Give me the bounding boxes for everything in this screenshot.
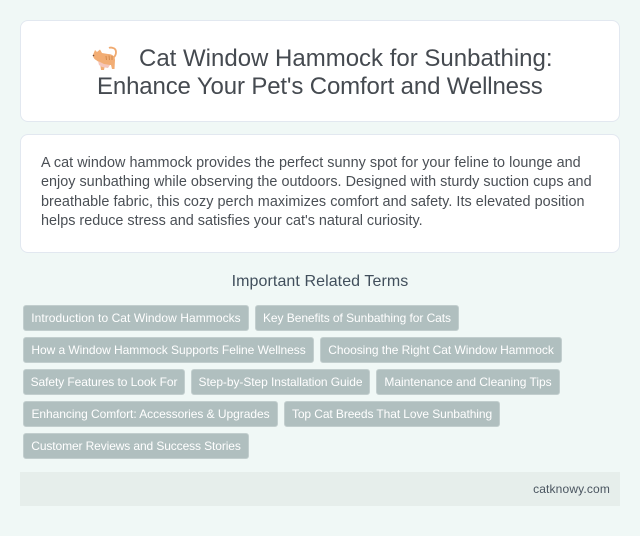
description text line 3: breathable fabric, this cozy perch maximizes comfort and safety. Its elevated position bbox=[41, 194, 585, 210]
tag: Choosing the Right Cat Window Hammock bbox=[328, 343, 554, 357]
heading: related terms: Important Related Terms bbox=[232, 273, 408, 290]
tag bbox=[376, 369, 560, 395]
tag bbox=[23, 337, 314, 363]
tag bbox=[23, 401, 278, 427]
tag: Step-by-Step Installation Guide bbox=[199, 375, 362, 389]
tag: Introduction to Cat Window Hammocks bbox=[31, 311, 241, 325]
tag: Customer Reviews and Success Stories bbox=[31, 439, 241, 453]
tag: Maintenance and Cleaning Tips bbox=[384, 375, 552, 389]
tag: Top Cat Breeds That Love Sunbathing bbox=[292, 407, 492, 421]
tag bbox=[191, 369, 370, 395]
description text line 1: A cat window hammock provides the perfect sunny spot for your feline to lounge and bbox=[41, 155, 581, 171]
icon: cat bbox=[92, 46, 117, 70]
title: Cat Window Hammock for Sunbathing: bbox=[139, 45, 553, 72]
tag bbox=[23, 369, 185, 395]
panel: description bbox=[20, 134, 620, 253]
description text line 2: enjoy sunbathing while observing the outdoors. Designed with sturdy suction cups and bbox=[41, 174, 592, 190]
tag: Key Benefits of Sunbathing for Cats bbox=[263, 311, 451, 325]
tag bbox=[320, 337, 562, 363]
panel: title card bbox=[20, 20, 620, 122]
tag: How a Window Hammock Supports Feline Wellness bbox=[31, 343, 306, 357]
title line 2: Enhance Your Pet's Comfort and Wellness bbox=[97, 73, 543, 100]
footer bbox=[20, 472, 620, 506]
tag: Enhancing Comfort: Accessories & Upgrades bbox=[31, 407, 270, 421]
tag: Safety Features to Look For bbox=[31, 375, 177, 389]
footer: catknowy.com bbox=[533, 482, 610, 496]
description text line 4: helps reduce stress and satisfies your cat's natural curiosity. bbox=[41, 213, 423, 229]
tag bbox=[284, 401, 500, 427]
tag bbox=[23, 433, 249, 459]
tag bbox=[23, 305, 249, 331]
tag bbox=[255, 305, 459, 331]
